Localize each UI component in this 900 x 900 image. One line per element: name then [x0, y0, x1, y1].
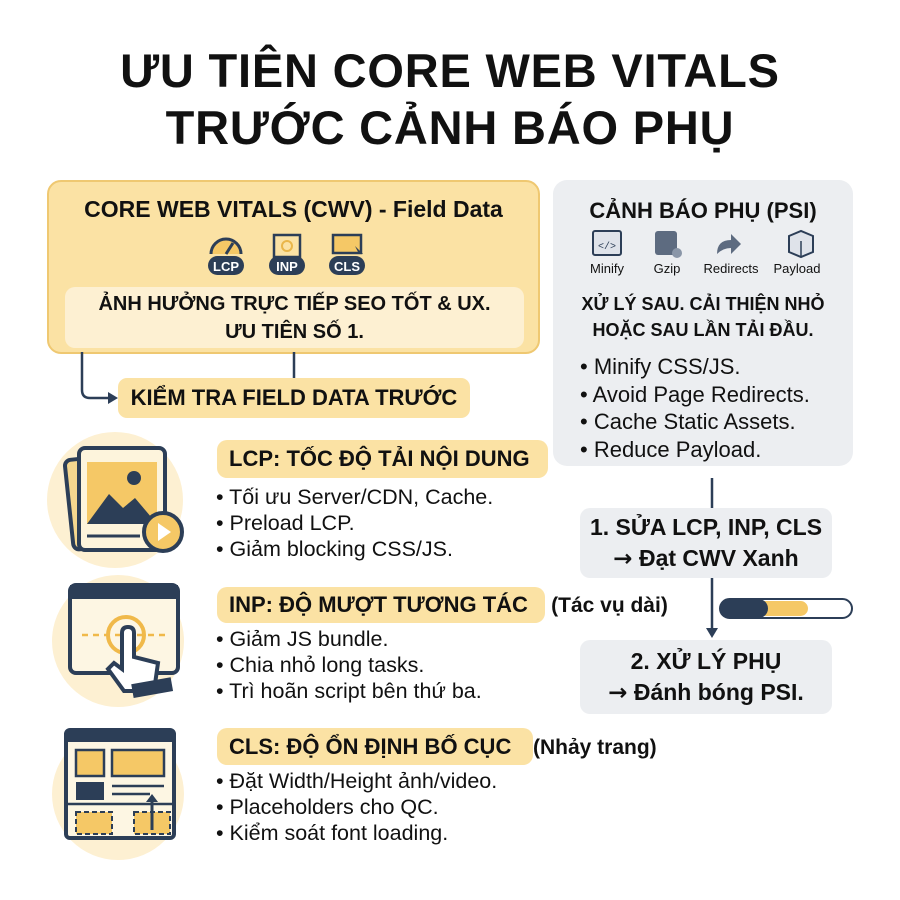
- list: psi fixes: • Minify CSS/JS.: [580, 354, 741, 379]
- heading: CLS: (Nhảy trang): [533, 736, 657, 759]
- list: psi fixes: • Reduce Payload.: [580, 436, 761, 462]
- title: ƯU TIÊN CORE WEB VITALS: [120, 44, 780, 97]
- text block: handle later: HOẶC SAU LẦN TẢI ĐẦU.: [592, 320, 814, 340]
- list: CLS: [216, 769, 497, 845]
- list: psi fixes: • Cache Static Assets.: [580, 409, 796, 434]
- list: INP: [216, 627, 482, 703]
- list: INP: • Giảm JS bundle.: [216, 627, 388, 651]
- step 2 box: 2. XỬ LÝ PHỤ: [631, 648, 781, 674]
- step 2 box: [580, 640, 832, 714]
- icons: cwv metrics: INP: [276, 259, 298, 274]
- progress bar: [719, 598, 853, 619]
- heading: INP: (Tác vụ dài): [551, 594, 668, 617]
- icon: CLS layout: [52, 728, 184, 860]
- list: INP: • Trì hoãn script bên thứ ba.: [216, 679, 482, 703]
- list: CLS: • Placeholders cho QC.: [216, 795, 439, 819]
- heading: CLS: CLS: ĐỘ ỔN ĐỊNH BỐ CỤC: [229, 734, 511, 759]
- icons: psi items: </>: [598, 241, 616, 253]
- callout: field data check: KIỂM TRA FIELD DATA TRƯỚC: [131, 385, 457, 410]
- list: CLS: • Kiểm soát font loading.: [216, 821, 448, 845]
- list: CLS: • Đặt Width/Height ảnh/video.: [216, 769, 497, 793]
- heading: INP: [217, 587, 668, 623]
- text block: impact: [65, 287, 524, 348]
- icons: psi items: Redirects: [704, 261, 759, 276]
- list: INP: • Chia nhỏ long tasks.: [216, 653, 424, 677]
- list: LCP: • Preload LCP.: [216, 511, 355, 535]
- panel: core web vitals: [47, 180, 540, 354]
- icons: cwv metrics: CLS: [334, 259, 360, 274]
- icons: cwv metrics: LCP: [213, 259, 239, 274]
- heading: cwv: CORE WEB VITALS (CWV) - Field Data: [84, 196, 503, 222]
- text block: impact: ẢNH HƯỞNG TRỰC TIẾP SEO TỐT & UX.: [98, 293, 491, 315]
- panel: PSI warnings: [553, 180, 853, 466]
- arrow: flow steps: [706, 478, 718, 638]
- list: LCP: [216, 485, 493, 561]
- step 1 box: 1. SỬA LCP, INP, CLS: [590, 514, 822, 540]
- heading: LCP: [217, 440, 548, 478]
- list: LCP: • Giảm blocking CSS/JS.: [216, 537, 453, 561]
- arrow: to field data check: [80, 352, 296, 404]
- text block: impact: ƯU TIÊN SỐ 1.: [225, 321, 364, 343]
- icon: INP tap: [52, 575, 184, 707]
- icons: psi items: Payload: [774, 261, 820, 276]
- list: LCP: • Tối ưu Server/CDN, Cache.: [216, 485, 493, 509]
- text block: handle later: [582, 293, 824, 340]
- text block: handle later: XỬ LÝ SAU. CẢI THIỆN NHỎ: [582, 294, 824, 314]
- step 1 box: → Đạt CWV Xanh: [613, 545, 799, 572]
- heading: INP: INP: ĐỘ MƯỢT TƯƠNG TÁC: [229, 592, 528, 617]
- heading: LCP: LCP: TỐC ĐỘ TẢI NỘI DUNG: [229, 446, 530, 471]
- title: TRƯỚC CẢNH BÁO PHỤ: [166, 101, 734, 154]
- list: psi fixes: [580, 354, 810, 462]
- icons: cwv metrics: [208, 234, 365, 275]
- callout: field data check: [118, 378, 470, 418]
- heading: psi: CẢNH BÁO PHỤ (PSI): [589, 198, 817, 223]
- icon: LCP image: [47, 432, 184, 568]
- icons: psi items: Minify: [590, 261, 624, 276]
- step 1 box: [580, 508, 832, 578]
- step 2 box: → Đánh bóng PSI.: [608, 679, 804, 706]
- icons: psi items: [590, 230, 820, 276]
- list: psi fixes: • Avoid Page Redirects.: [580, 382, 810, 406]
- title: [120, 44, 780, 154]
- heading: CLS: [217, 728, 657, 765]
- icons: psi items: Gzip: [654, 261, 680, 276]
